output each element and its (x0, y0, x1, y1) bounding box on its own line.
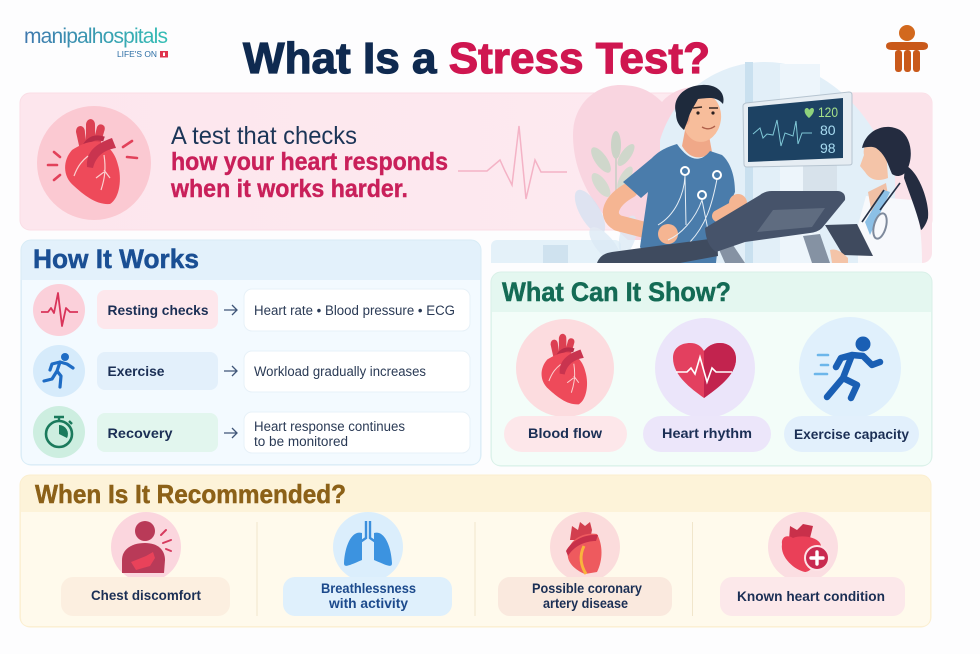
item: blood flow: Blood flow (528, 425, 602, 441)
definition text: when it works harder. (170, 175, 408, 203)
row: exercise (33, 345, 470, 397)
ECG line (458, 126, 567, 199)
row: recovery: to be monitored (254, 434, 348, 449)
definition text: A test that checks (171, 122, 357, 150)
item: known heart condition (720, 512, 905, 616)
panel: hero definition (20, 93, 932, 230)
item: chest discomfort (61, 512, 230, 616)
monitor: 98 (820, 140, 836, 156)
panel: When Is It Recommended (20, 475, 931, 627)
item: coronary artery disease (498, 512, 672, 616)
doctor (825, 127, 928, 263)
item: breathlessness: Breathlessness (321, 580, 416, 596)
item: chest discomfort: Chest discomfort (91, 587, 201, 603)
title: What Is a Stress Test? (243, 34, 710, 83)
heading: How It Works (33, 244, 199, 274)
monitor: 120 (818, 104, 838, 120)
heading: What Can It Show? (502, 277, 731, 307)
row: recovery: Heart response continues (254, 419, 405, 434)
row: exercise: Workload gradually increases (254, 364, 426, 379)
monitor: 80 (820, 122, 836, 138)
row: exercise: Exercise (108, 363, 165, 379)
icon: heart in circle (37, 106, 151, 220)
definition text (170, 122, 448, 203)
row: recovery (33, 406, 470, 458)
item: heart rhythm (643, 318, 771, 452)
pink heart backdrop (573, 85, 691, 240)
logo: manipal hospitals (24, 25, 168, 59)
heading: When Is It Recommended? (35, 479, 346, 509)
panel: How It Works (21, 240, 481, 465)
definition text: how your heart responds (171, 148, 448, 176)
logo: manipal hospitals: LIFE'S ON (117, 49, 157, 59)
item: exercise capacity: Exercise capacity (794, 426, 909, 442)
item: breathlessness (283, 512, 452, 616)
item: coronary artery disease: artery disease (543, 595, 628, 611)
item: blood flow (504, 319, 627, 452)
illustration: patient on treadmill with doctor (491, 62, 932, 270)
plant leaves (574, 131, 636, 251)
row: resting checks (33, 284, 470, 336)
treadmill (597, 191, 845, 263)
row: resting checks: Resting checks (108, 302, 209, 318)
row: resting checks: Heart rate • Blood pressure • ECG (254, 303, 455, 318)
item: coronary artery disease: Possible coronary (532, 580, 642, 596)
icon: orange figure logo (886, 25, 928, 72)
blue arch backdrop (660, 62, 895, 263)
left room strip (491, 240, 620, 263)
logo: manipal hospitals: manipalhospitals (24, 25, 168, 48)
right pink band (920, 224, 932, 263)
panel: What Can It Show (491, 272, 932, 466)
row: recovery: Recovery (108, 425, 173, 441)
item: breathlessness: with activity (328, 595, 408, 611)
item: known heart condition: Known heart condition (737, 588, 885, 604)
monitor (743, 92, 852, 195)
item: exercise capacity (784, 317, 919, 452)
item: heart rhythm: Heart rhythm (662, 425, 752, 441)
man (611, 85, 747, 263)
